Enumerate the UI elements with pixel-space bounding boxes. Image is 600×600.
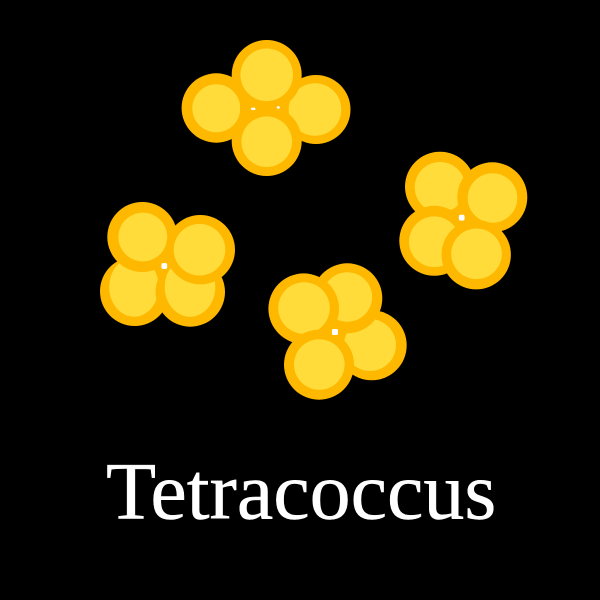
left cluster of four cocci xyxy=(100,202,235,327)
lower middle cluster of four cocci xyxy=(268,263,407,400)
right cluster of four cocci xyxy=(399,152,527,289)
title: Tetracoccus xyxy=(106,445,496,536)
top cluster of four cocci xyxy=(182,40,350,176)
